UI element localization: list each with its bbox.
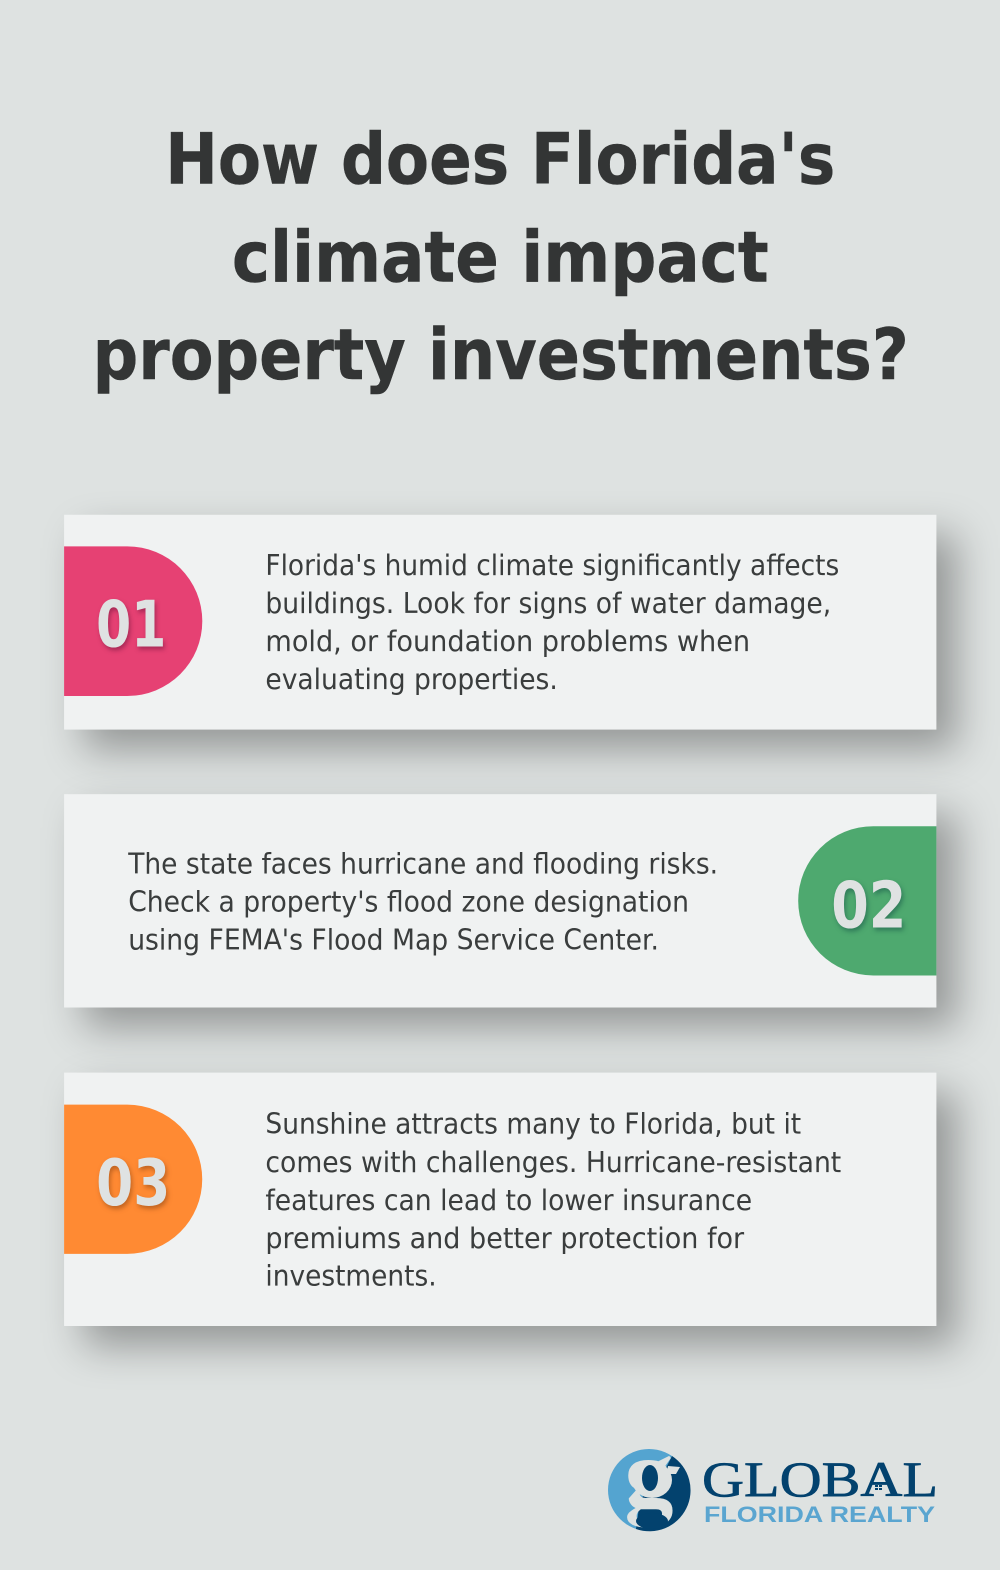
text block 01: evaluating properties. bbox=[265, 663, 558, 696]
panel: step 02 hurricane and flooding bbox=[64, 794, 936, 1008]
card background 02 bbox=[64, 794, 936, 1008]
badge: 03: 03 bbox=[96, 1147, 170, 1221]
panel: step 03 sunshine bbox=[64, 1073, 936, 1326]
text block 02: The state faces hurricane and flooding risks. bbox=[127, 847, 718, 880]
icon: window bbox=[875, 1485, 882, 1490]
card background 03 bbox=[64, 1073, 936, 1326]
icon: g roundel bbox=[608, 1420, 691, 1531]
text block 01: mold, or foundation problems when bbox=[265, 625, 750, 658]
wordmark: FLORIDA REALTY: FLORIDA REALTY bbox=[704, 1502, 935, 1527]
icon: g roundel: g bbox=[624, 1420, 674, 1528]
text block 01 bbox=[265, 549, 839, 696]
badge: 02: 02 bbox=[831, 869, 906, 943]
badge: 01: 01 bbox=[96, 588, 166, 662]
text block 02 bbox=[127, 847, 718, 956]
title: property investments? bbox=[93, 314, 909, 396]
text block 03: features can lead to lower insurance bbox=[265, 1184, 752, 1217]
text block 03: investments. bbox=[265, 1259, 437, 1292]
wordmark: GLOBAL: GLOBAL bbox=[702, 1451, 938, 1507]
panel: step 01 humid climate bbox=[64, 515, 936, 730]
title bbox=[93, 118, 909, 396]
infographic content bbox=[64, 118, 936, 1326]
text block 03: comes with challenges. Hurricane-resistant bbox=[265, 1146, 841, 1179]
badge: 01 bbox=[64, 546, 202, 696]
text block 02: using FEMA's Flood Map Service Center. bbox=[128, 923, 659, 956]
text block 02: Check a property's flood zone designation bbox=[128, 885, 689, 918]
logo: Global Florida Realty bbox=[608, 1420, 938, 1531]
badge: 02 bbox=[798, 826, 936, 975]
title: climate impact bbox=[232, 216, 769, 298]
title: How does Florida's bbox=[165, 118, 835, 200]
text block 03 bbox=[265, 1108, 841, 1292]
text block 03: premiums and better protection for bbox=[265, 1222, 744, 1255]
text block 01: Florida's humid climate significantly affects bbox=[265, 549, 839, 582]
card background 01 bbox=[64, 515, 936, 730]
badge: 03 bbox=[64, 1105, 202, 1254]
text block 03: Sunshine attracts many to Florida, but it bbox=[265, 1108, 801, 1141]
text block 01: buildings. Look for signs of water damage, bbox=[265, 587, 831, 620]
